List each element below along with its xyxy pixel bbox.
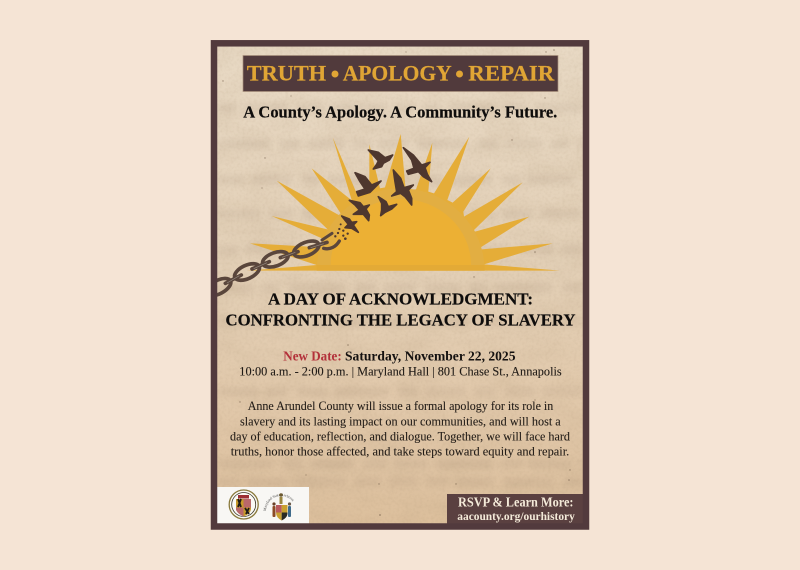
chain link (292, 239, 321, 259)
chain link (232, 262, 262, 282)
RSVP call to action: RSVP & Learn More: (458, 494, 574, 509)
sun outer disc (317, 188, 485, 271)
subtitle: A County’s Apology. A Community’s Future. (243, 102, 557, 122)
event heading: CONFRONTING THE LEGACY OF SLAVERY (226, 310, 576, 329)
event time and location: 10:00 a.m. - 2:00 p.m. | Maryland Hall | 801 Chase St., Annapolis (239, 364, 562, 379)
sun inner disc (331, 199, 471, 265)
description paragraph: truths, honor those affected, and take steps toward equity and repair. (231, 443, 569, 458)
panel: aged paper (217, 46, 583, 524)
sun rays (247, 134, 560, 271)
event heading: A DAY OF ACKNOWLEDGMENT: (268, 289, 533, 308)
title banner: TRUTH (247, 61, 327, 86)
illustration: birds in flight (334, 148, 432, 240)
event date: New Date: (283, 350, 342, 365)
RSVP call to action (447, 494, 583, 524)
broken link (324, 241, 339, 249)
event heading (226, 289, 576, 329)
bird (368, 150, 393, 169)
bird (378, 197, 397, 216)
description paragraph: Anne Arundel County will issue a formal apology for its role in (248, 398, 554, 413)
description paragraph: day of education, reflection, and dialogue. Together, we will face hard (230, 428, 570, 443)
chain fragments (334, 223, 349, 240)
description paragraph: slavery and its lasting impact on our communities, and will host a (240, 413, 561, 428)
title banner: REPAIR (468, 61, 555, 86)
chain link (260, 250, 290, 269)
illustration: breaking chain (204, 233, 339, 299)
logos panel (217, 487, 309, 524)
title banner (243, 56, 558, 92)
event date: Saturday, November 22, 2025 (345, 350, 516, 365)
chain link (217, 276, 233, 297)
description paragraph (230, 398, 570, 458)
chain highlights (227, 244, 324, 283)
bird (403, 148, 432, 182)
poster frame (214, 43, 586, 527)
sun base band (317, 265, 485, 271)
edge-on links (225, 242, 327, 283)
RSVP call to action: aacounty.org/ourhistory (457, 509, 575, 523)
bird (392, 170, 413, 205)
bird (342, 216, 358, 232)
logo: county seal (229, 490, 258, 519)
title banner: APOLOGY (343, 61, 452, 86)
illustration: rising sun (247, 134, 560, 271)
bird (355, 173, 381, 196)
bird (349, 200, 369, 221)
logo: Maryland State Archives seal: Maryland State Archives (264, 494, 294, 511)
